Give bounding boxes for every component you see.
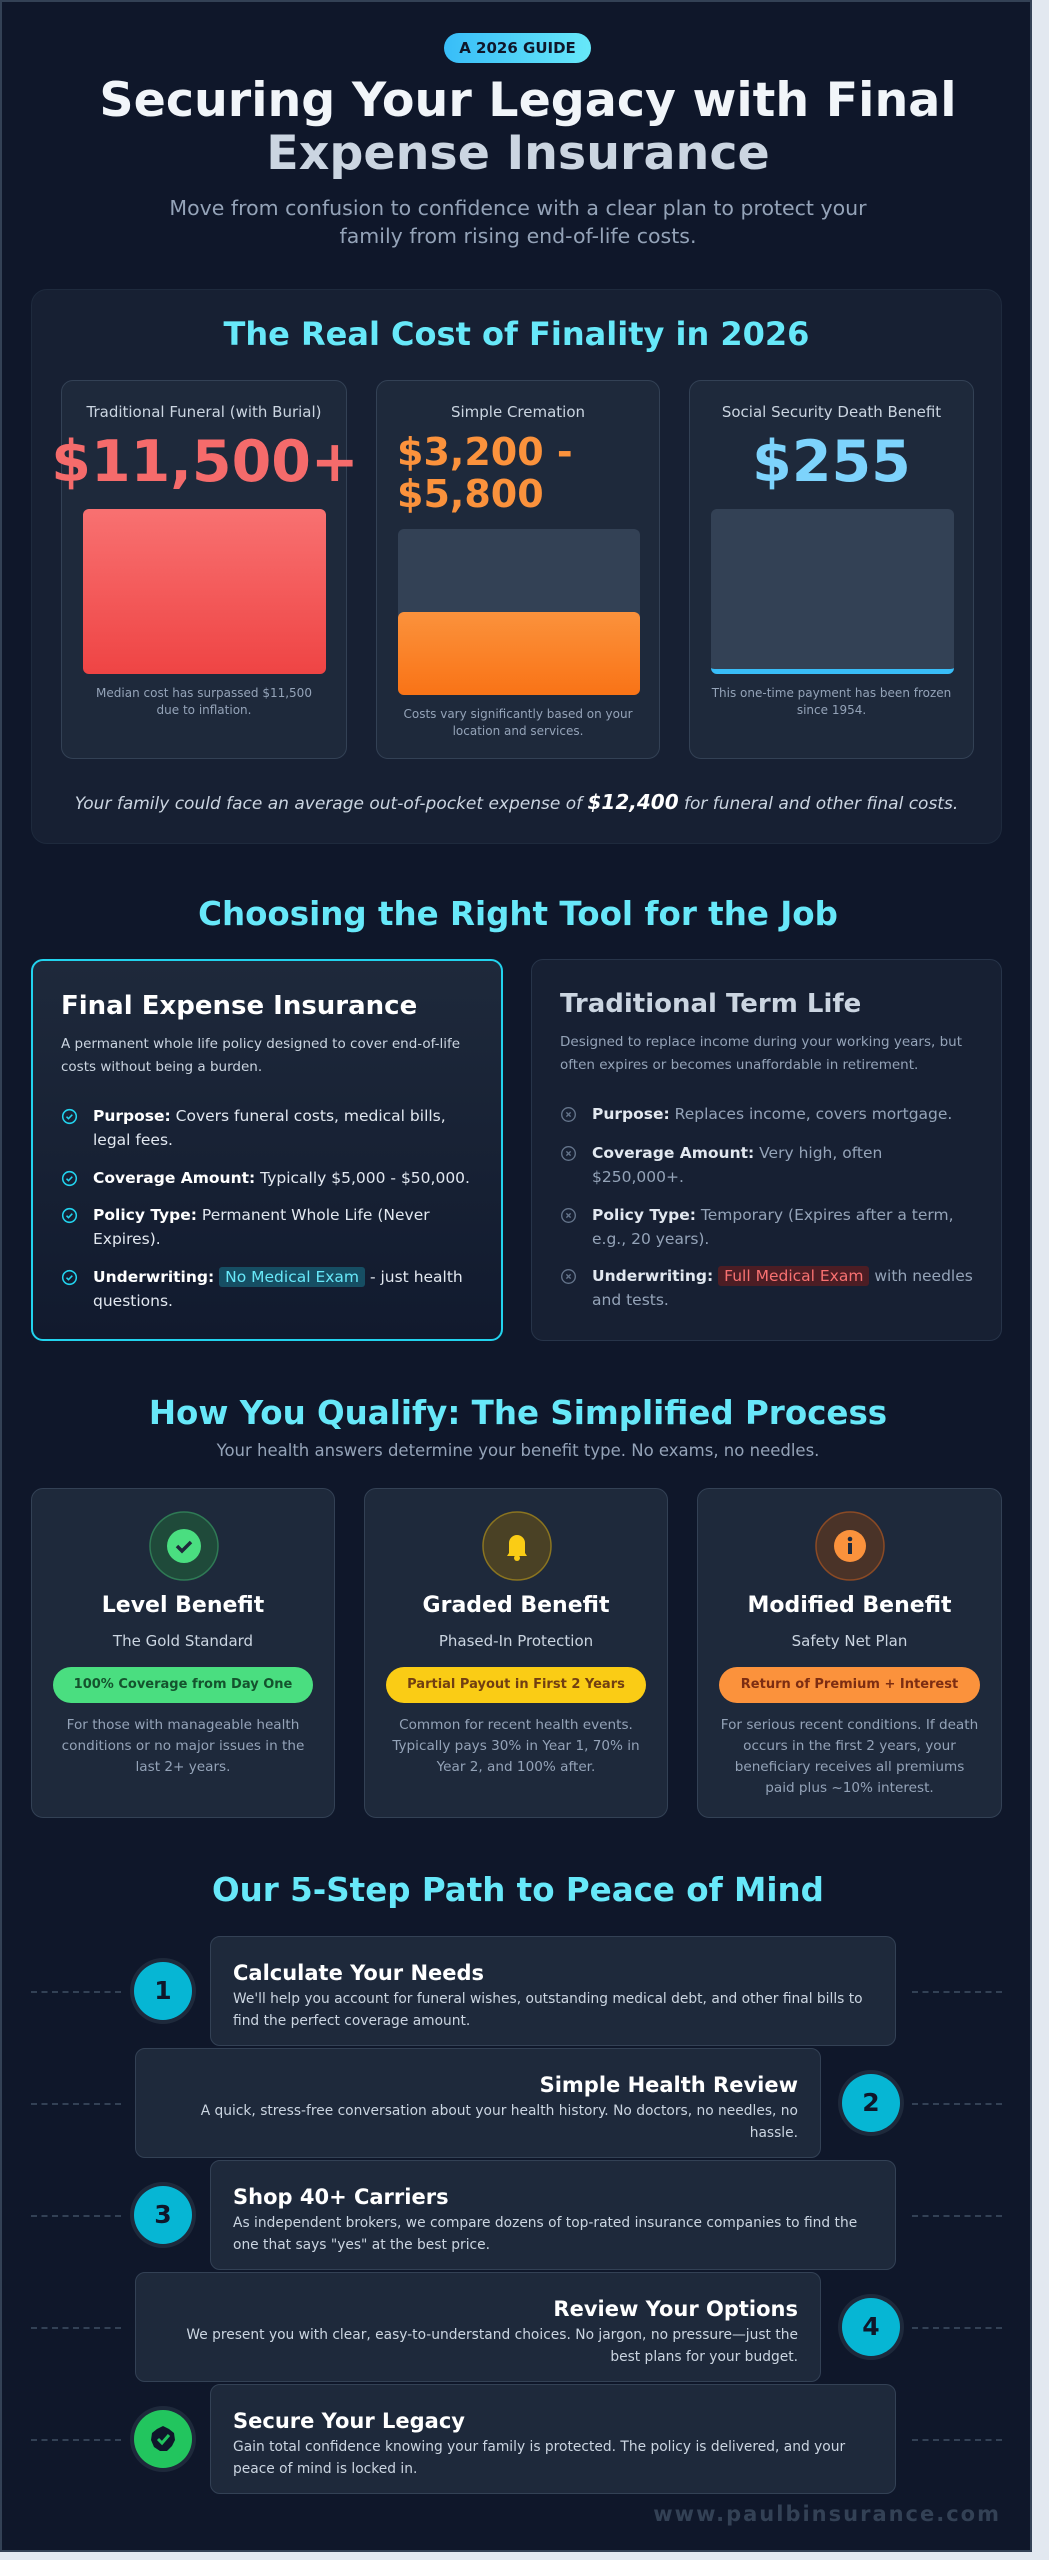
panel: term life: Coverage Amount: Very high, often $250,000+. <box>592 1144 882 1186</box>
step 4: Review Your Options <box>553 2297 798 2321</box>
card: funeral <box>61 380 347 759</box>
card: graded benefit: Graded Benefit <box>423 1593 609 1618</box>
panel: term life: Designed to replace income during your working years, but often expires or becomes unaffordable in retirement. <box>560 1034 962 1073</box>
step 5: Secure Your Legacy <box>233 2409 465 2433</box>
value: cremation: $3,200 - <box>397 430 573 474</box>
panel: final expense: Coverage Amount: Typically $5,000 - $50,000. <box>93 1169 470 1187</box>
step 2: A quick, stress-free conversation about your health history. No doctors, no needles, no hassle. <box>201 2103 798 2141</box>
number 2: 2 <box>862 2088 880 2117</box>
subheading: qualify: Your health answers determine your benefit type. No exams, no needles. <box>217 1441 819 1460</box>
card: modified benefit: For serious recent conditions. If death occurs in the first 2 years, your beneficiary receives all premiums paid plus ~10% interest. <box>721 1717 978 1796</box>
panel: term life: Policy Type: Temporary (Expires after a term, e.g., 20 years). <box>592 1206 954 1248</box>
callout: out of pocket: Your family could face an average out-of-pocket expense of $12,400 for funeral and other final costs. <box>75 790 958 814</box>
card: cremation: Simple Cremation <box>451 403 585 421</box>
card: graded benefit: Partial Payout in First 2 Years <box>407 1677 625 1692</box>
number 3: 3 <box>154 2200 172 2229</box>
step 1 <box>210 1936 896 2046</box>
step 1: Calculate Your Needs <box>233 1961 484 1985</box>
card: graded benefit: Common for recent health events. Typically pays 30% in Year 1, 70% in Year 2, and 100% after. <box>392 1717 640 1775</box>
title <box>99 73 957 181</box>
heading: choosing: Choosing the Right Tool for the Job <box>198 895 838 933</box>
value: cremation: $5,800 <box>397 472 544 516</box>
list: final expense <box>62 1107 470 1310</box>
number 3 <box>134 2186 192 2244</box>
icon: step 5 badge <box>134 2410 192 2468</box>
card: level benefit: For those with manageable health conditions or no major issues in the last 2+ years. <box>62 1717 304 1775</box>
subtitle: Move from confusion to confidence with a clear plan to protect your <box>169 196 867 220</box>
title: Securing Your Legacy with Final <box>99 73 957 128</box>
heading: steps: Our 5-Step Path to Peace of Mind <box>212 1871 824 1909</box>
step 4 <box>135 2272 821 2382</box>
badge <box>444 33 591 63</box>
number 4: 4 <box>862 2312 880 2341</box>
number 1: 1 <box>154 1976 172 2005</box>
step 3: Shop 40+ Carriers <box>233 2185 449 2209</box>
panel: term life: Underwriting: Full Medical Exam with needles and tests. <box>592 1267 973 1309</box>
card: funeral: Median cost has surpassed $11,500 <box>96 686 312 700</box>
badge: A 2026 GUIDE <box>459 39 576 57</box>
bar: ss <box>711 509 954 674</box>
bar: cremation <box>398 529 640 695</box>
list: term life <box>561 1105 973 1309</box>
step 3: As independent brokers, we compare dozens of top-rated insurance companies to find the one that says "yes" at the best price. <box>233 2215 857 2253</box>
heading: real cost: The Real Cost of Finality in 2026 <box>224 315 809 353</box>
bar: funeral <box>83 509 326 674</box>
footer url: www.paulbinsurance.com <box>653 2502 1001 2526</box>
card: social security <box>689 380 974 759</box>
card: cremation: location and services. <box>453 724 583 738</box>
number 1 <box>134 1962 192 2020</box>
icon: check <box>149 1511 219 1581</box>
card: graded benefit <box>364 1488 668 1818</box>
step 5: Gain total confidence knowing your family is protected. The policy is delivered, and your peace of mind is locked in. <box>233 2439 845 2477</box>
card: social security: Social Security Death Benefit <box>722 403 941 421</box>
card: cremation: Costs vary significantly based on your <box>403 707 633 721</box>
card: funeral: due to inflation. <box>157 703 251 717</box>
card: funeral: Traditional Funeral (with Burial) <box>86 403 322 421</box>
panel: final expense: Underwriting: No Medical Exam - just health questions. <box>93 1268 463 1310</box>
panel: final expense <box>31 959 503 1341</box>
step 5 <box>210 2384 896 2494</box>
panel: final expense: A permanent whole life policy designed to cover end-of-life costs without being a burden. <box>61 1036 460 1075</box>
panel: term life: Traditional Term Life <box>560 989 861 1019</box>
card: level benefit: The Gold Standard <box>113 1632 253 1650</box>
card: level benefit <box>31 1488 335 1818</box>
card: social security: since 1954. <box>797 703 866 717</box>
card: cremation <box>376 380 660 759</box>
card: modified benefit <box>697 1488 1002 1818</box>
step 2: Simple Health Review <box>540 2073 798 2097</box>
value: funeral: $11,500+ <box>51 429 359 495</box>
panel: final expense: Purpose: Covers funeral costs, medical bills, legal fees. <box>93 1107 446 1149</box>
card: graded benefit: Phased-In Protection <box>439 1632 593 1650</box>
card: modified benefit: Safety Net Plan <box>792 1632 907 1650</box>
step 3 <box>210 2160 896 2270</box>
step 2 <box>135 2048 821 2158</box>
number 4 <box>842 2298 900 2356</box>
icon: info <box>815 1511 885 1581</box>
step 4: We present you with clear, easy-to-understand choices. No jargon, no pressure—just the best plans for your budget. <box>186 2327 798 2365</box>
card: social security: This one-time payment has been frozen <box>712 686 951 700</box>
number 2 <box>842 2074 900 2132</box>
heading: qualify: How You Qualify: The Simplified Process <box>149 1394 887 1432</box>
subtitle <box>169 196 867 248</box>
card: level benefit: Level Benefit <box>102 1593 264 1618</box>
value: ss: $255 <box>752 429 911 495</box>
value: cremation <box>397 430 573 516</box>
panel: term life <box>531 959 1002 1341</box>
title: Expense Insurance <box>266 126 770 181</box>
card: level benefit: 100% Coverage from Day One <box>74 1677 292 1692</box>
panel: final expense: Policy Type: Permanent Whole Life (Never Expires). <box>93 1206 430 1248</box>
card: modified benefit: Modified Benefit <box>747 1593 952 1618</box>
panel: final expense: Final Expense Insurance <box>61 991 417 1021</box>
subtitle: family from rising end-of-life costs. <box>340 224 696 248</box>
icon: bell <box>482 1511 552 1581</box>
card: modified benefit: Return of Premium + Interest <box>741 1677 958 1692</box>
step 1: We'll help you account for funeral wishes, outstanding medical debt, and other final bills to find the perfect coverage amount. <box>233 1991 863 2029</box>
panel: term life: Purpose: Replaces income, covers mortgage. <box>592 1105 952 1123</box>
panel: real cost <box>31 289 1002 844</box>
